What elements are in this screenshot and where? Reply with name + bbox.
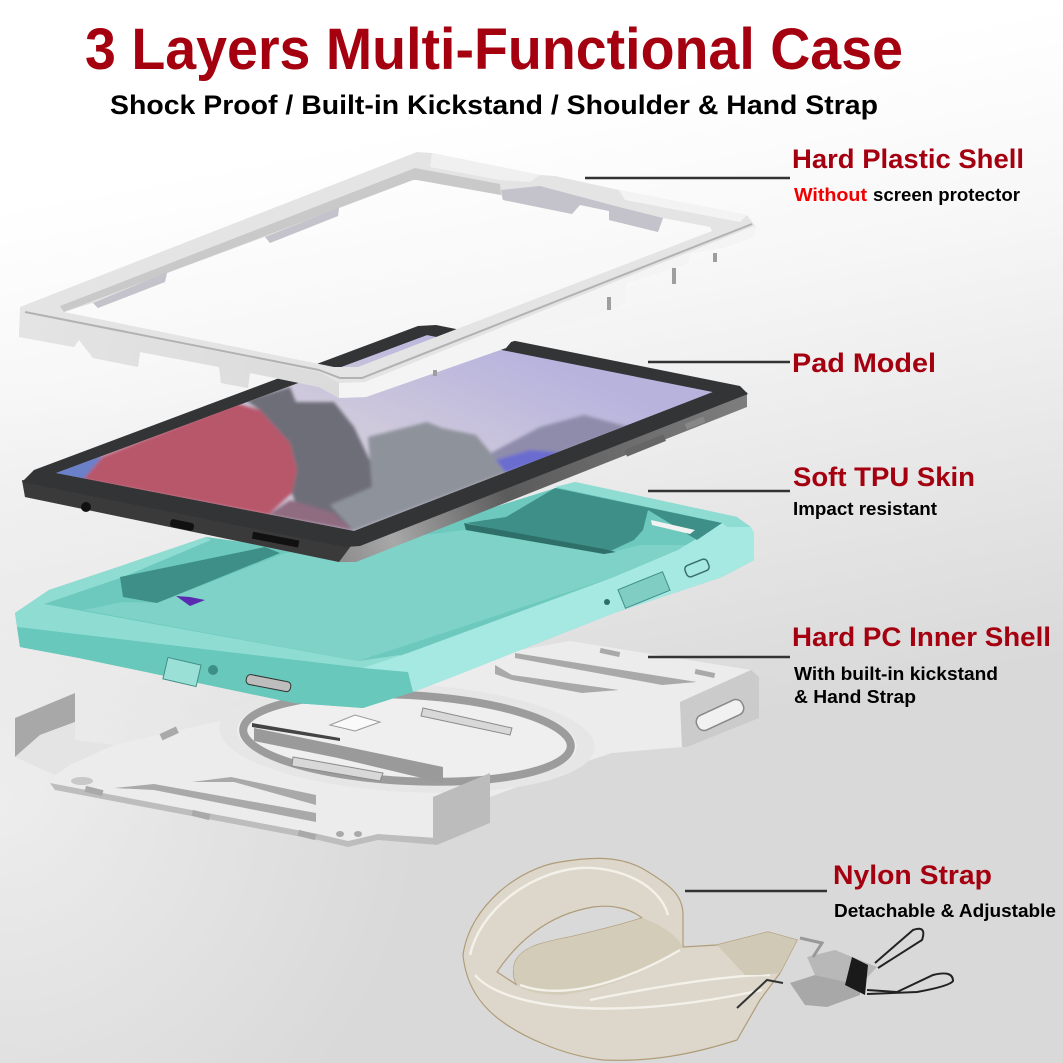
shell lower edge bbox=[50, 783, 437, 847]
label: hard plastic shell bbox=[792, 144, 1024, 205]
label: hard PC inner shell: & Hand Strap bbox=[794, 687, 916, 707]
tpu inner wall bbox=[120, 547, 280, 603]
tpu right wall bbox=[363, 520, 754, 692]
left tab bbox=[15, 693, 114, 775]
label: soft TPU skin bbox=[793, 462, 975, 519]
soft TPU skin bbox=[15, 482, 754, 708]
label: hard plastic shell: screen protector bbox=[873, 185, 1020, 205]
front tab bbox=[433, 773, 490, 845]
strap body bbox=[463, 858, 797, 1060]
strap inner band bbox=[514, 918, 683, 995]
shell front right wall bbox=[339, 226, 756, 398]
shell top right band bbox=[430, 153, 540, 182]
label: hard PC inner shell bbox=[792, 622, 1051, 707]
tpu front wall bbox=[17, 627, 413, 708]
tpu body bbox=[15, 482, 754, 708]
tablet face bbox=[22, 325, 748, 547]
label: hard PC inner shell: Hard PC Inner Shell bbox=[792, 622, 1051, 652]
nylon strap bbox=[463, 858, 797, 1060]
shell clips bbox=[433, 253, 717, 376]
label: pad model: Pad Model bbox=[792, 348, 936, 378]
hard plastic shell bbox=[19, 152, 756, 398]
label: soft TPU skin: Soft TPU Skin bbox=[793, 462, 975, 492]
label: nylon strap: Nylon Strap bbox=[833, 860, 992, 890]
shell slots bbox=[71, 648, 715, 840]
shell frame bbox=[19, 152, 756, 398]
tablet sides bbox=[22, 392, 747, 562]
subtitle: Shock Proof / Built-in Kickstand / Shoulder & Hand Strap bbox=[110, 90, 878, 120]
title: 3 Layers Multi-Functional Case bbox=[85, 17, 903, 82]
tpu kickstand bbox=[464, 523, 616, 554]
shell inner ledge bbox=[60, 168, 501, 312]
strap tail bbox=[717, 932, 797, 975]
label: hard plastic shell: Without bbox=[794, 185, 867, 205]
right tab bbox=[680, 670, 759, 747]
tpu upper wall bbox=[466, 488, 722, 554]
label: nylon strap bbox=[833, 860, 1056, 921]
strap clips and cords bbox=[737, 929, 953, 1008]
shell rim shadow bbox=[25, 224, 752, 378]
label: nylon strap: Detachable & Adjustable bbox=[834, 901, 1056, 921]
tpu ports bbox=[163, 558, 710, 692]
tablet ports bbox=[81, 416, 705, 548]
label: hard plastic shell: Hard Plastic Shell bbox=[792, 144, 1024, 174]
pad model bbox=[22, 325, 748, 562]
shell front left wall bbox=[19, 312, 339, 398]
label: soft TPU skin: Impact resistant bbox=[793, 499, 937, 519]
label: hard PC inner shell: With built-in kickstand bbox=[794, 664, 998, 684]
shell body bbox=[50, 641, 751, 847]
tpu top-right rim bbox=[555, 482, 751, 527]
shell inner tabs bbox=[93, 186, 663, 308]
leader lines bbox=[585, 178, 827, 891]
strap stitching bbox=[470, 868, 770, 1009]
hard PC inner shell bbox=[15, 641, 759, 847]
tpu left rim bbox=[15, 537, 408, 672]
rotating ring bbox=[216, 674, 598, 802]
tablet screen bbox=[40, 335, 713, 531]
tpu floor bbox=[83, 530, 700, 661]
